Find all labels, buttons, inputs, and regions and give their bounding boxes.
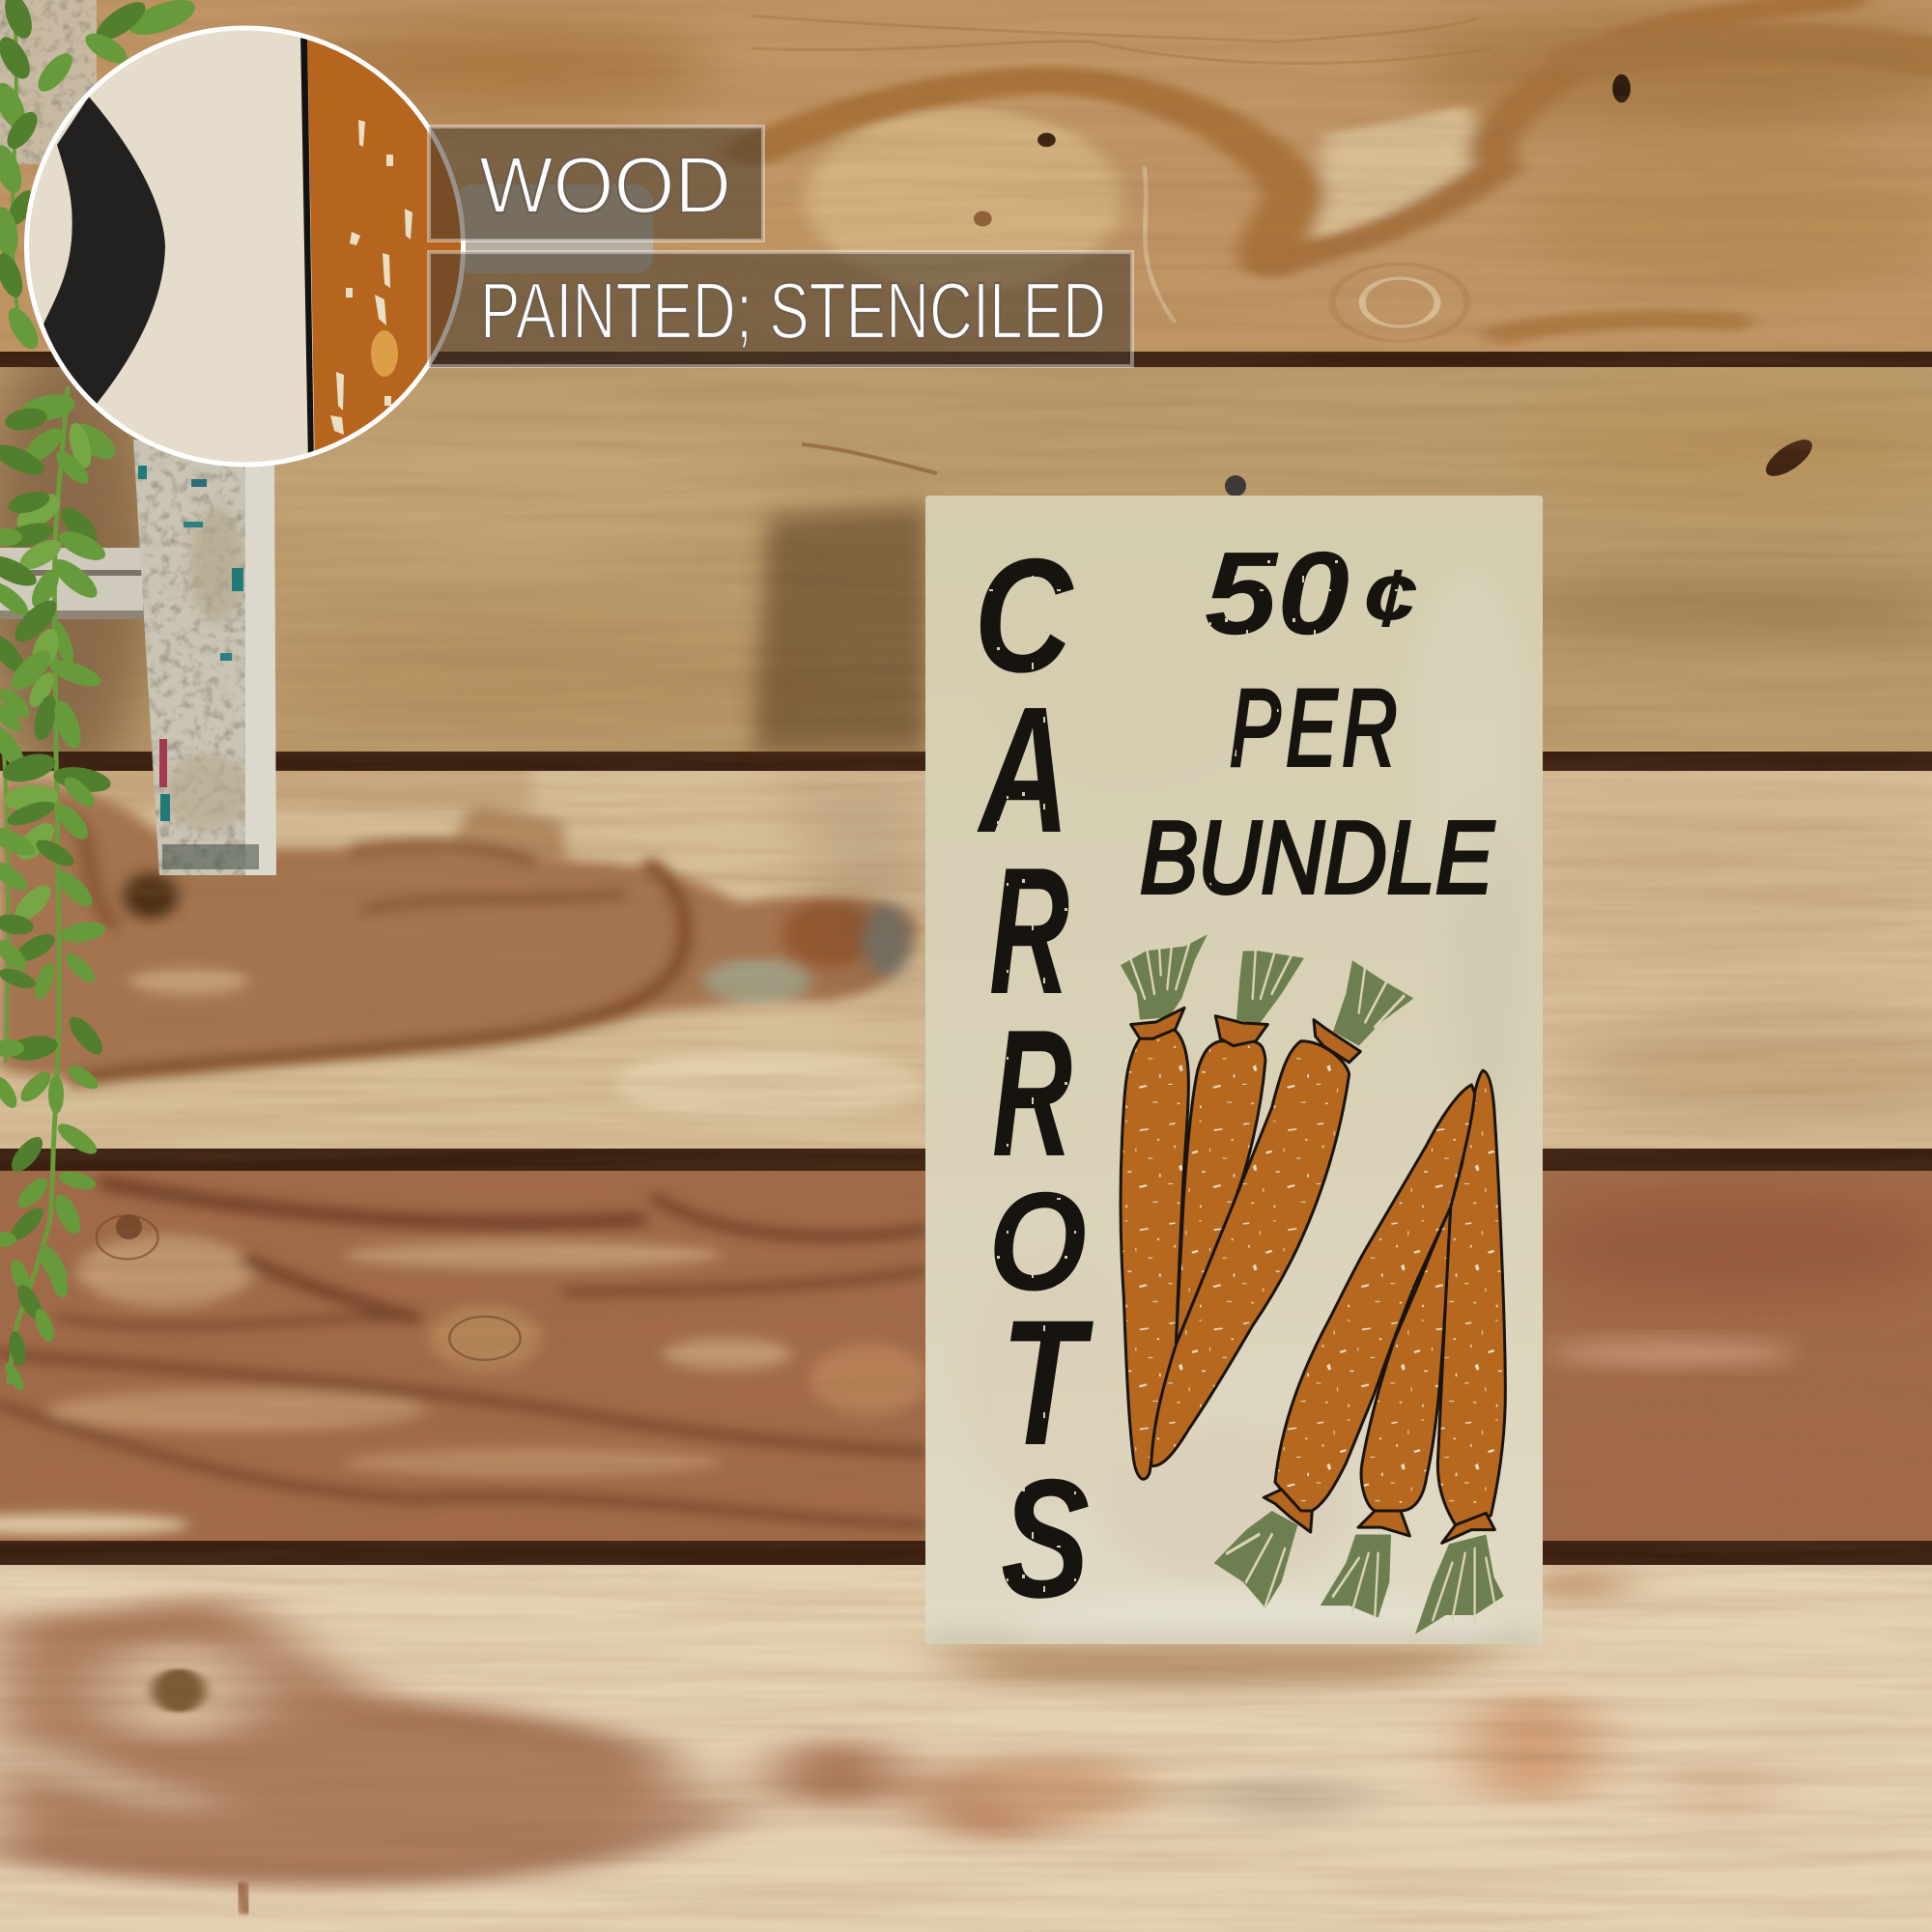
orange painted strip xyxy=(307,40,461,450)
plank 1 xyxy=(0,0,1932,352)
price text: 50 cents xyxy=(1205,527,1417,659)
black stencil crescent xyxy=(43,97,165,404)
vertical word: CARROTS xyxy=(974,525,1094,1634)
vertical word: CARROTS: O xyxy=(988,1163,1087,1320)
distressed paint flecks xyxy=(330,120,412,435)
carrot bodies xyxy=(1121,1029,1505,1525)
label: WOOD xyxy=(429,127,763,241)
black stencil line xyxy=(300,29,314,464)
panel: carrots wooden sign xyxy=(925,475,1543,1656)
carrot illustrations xyxy=(1121,934,1505,1634)
vertical word: CARROTS: R xyxy=(992,992,1072,1194)
label: PAINTED; STENCILED xyxy=(429,252,1132,366)
plank 4 xyxy=(0,1171,1932,1541)
hanging green vine xyxy=(0,0,200,1393)
plank 5 xyxy=(0,1565,1932,1932)
plank 2 xyxy=(0,367,1932,752)
vertical word: CARROTS: A xyxy=(977,670,1069,870)
vertical word: CARROTS: S xyxy=(1001,1445,1090,1634)
whitewashed wooden bracket xyxy=(0,0,653,879)
plank 3 xyxy=(0,753,1932,1149)
screw xyxy=(1225,475,1246,497)
price text: 50 cents: ¢ xyxy=(1363,553,1417,643)
text: BUNDLE: BUNDLE xyxy=(1140,801,1494,915)
sign shadow on wall xyxy=(753,507,927,1014)
vertical word: CARROTS: R xyxy=(989,830,1069,1032)
sign board xyxy=(925,496,1543,1656)
label: PAINTED; STENCILED: PAINTED; STENCILED xyxy=(480,266,1106,355)
carrot greens xyxy=(1121,934,1504,1634)
vertical word: CARROTS: C xyxy=(974,525,1074,706)
text: PER: PER xyxy=(1230,668,1403,788)
carrot crowns xyxy=(1131,1008,1494,1543)
price text: 50 cents: 50 xyxy=(1205,527,1350,659)
label: WOOD: WOOD xyxy=(479,140,731,230)
callout: material detail circle inset xyxy=(19,19,483,473)
vertical word: CARROTS: T xyxy=(1001,1284,1094,1483)
